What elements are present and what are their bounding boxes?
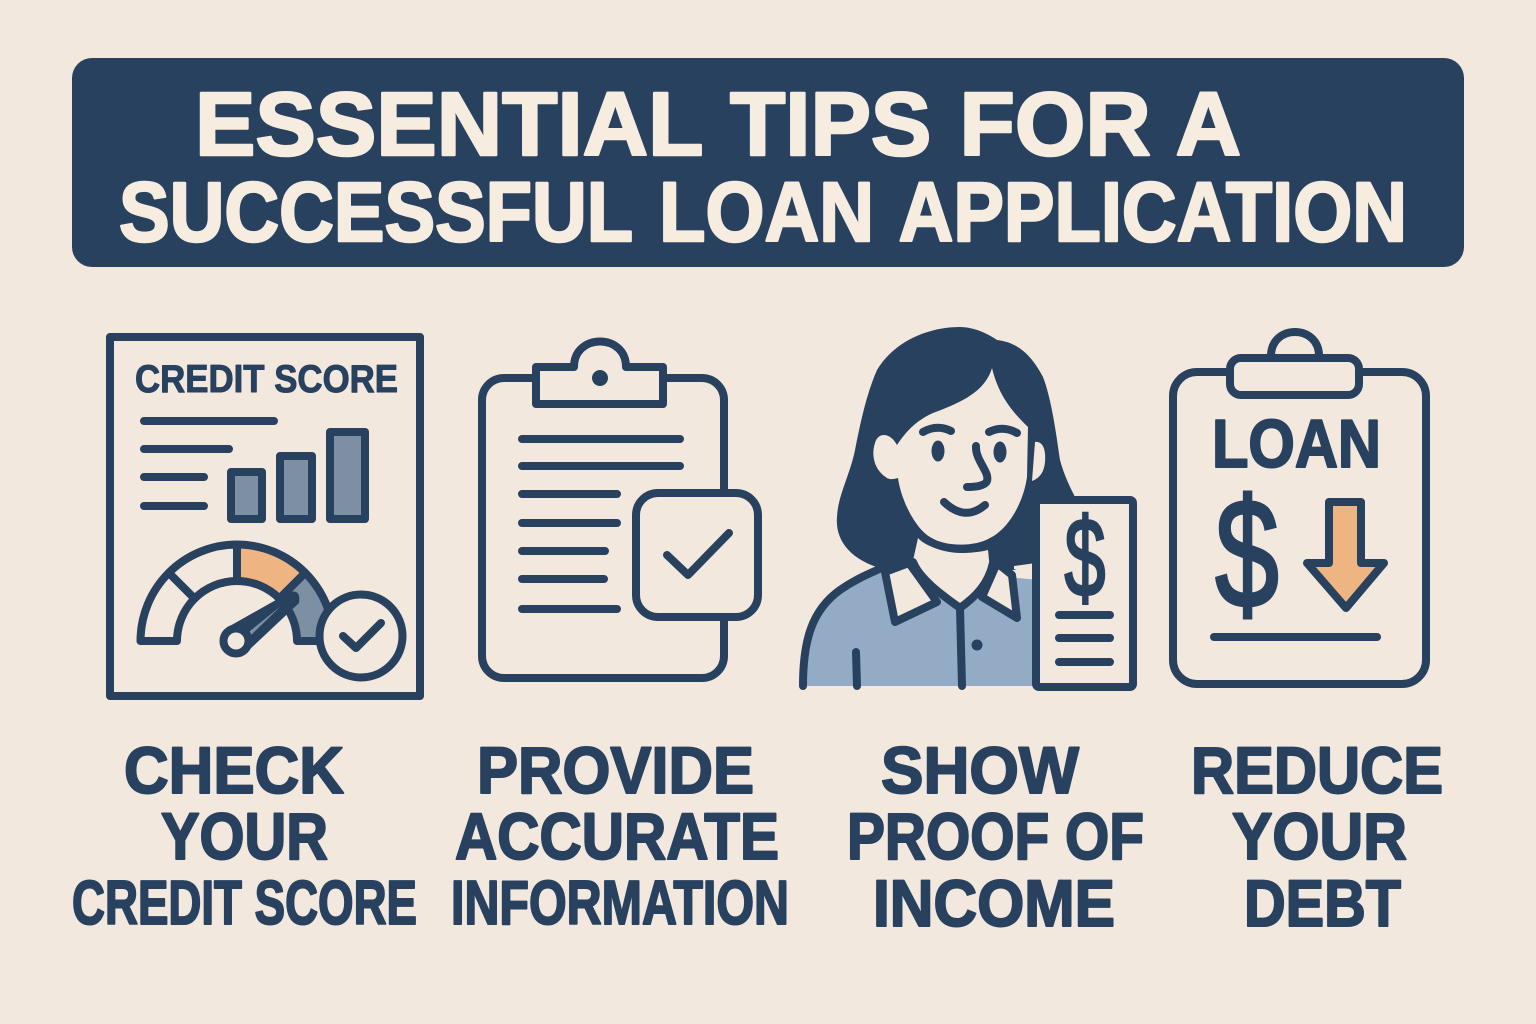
caption: reduce your debt: DEBT — [1244, 866, 1401, 940]
shirt — [803, 566, 1040, 686]
icon: loan clipboard with debt arrow — [1173, 332, 1426, 684]
caption: check your credit score: YOUR — [161, 799, 328, 873]
shirt outline — [803, 566, 885, 686]
caption: reduce your debt: REDUCE — [1191, 733, 1443, 807]
caption: check your credit score: CHECK — [124, 733, 344, 807]
caption: provide accurate information: PROVIDE — [477, 733, 754, 807]
caption: show proof of income: SHOW — [881, 733, 1080, 807]
caption: reduce your debt: YOUR — [1232, 799, 1407, 873]
clipboard clip — [1230, 332, 1359, 395]
check box — [636, 493, 758, 617]
income receipt — [1036, 496, 1133, 687]
caption: show proof of income — [847, 733, 1144, 940]
caption: reduce your debt — [1191, 733, 1443, 940]
caption: provide accurate information — [451, 733, 789, 938]
underline — [1214, 633, 1377, 641]
form lines — [522, 439, 680, 609]
right ear — [1032, 442, 1045, 481]
icon: credit score report — [110, 337, 420, 696]
hair — [837, 327, 1075, 570]
face — [873, 368, 1028, 545]
shirt details — [856, 608, 982, 686]
title line 2: SUCCESSFUL LOAN APPLICATION — [119, 165, 1407, 259]
icon: person with income receipt — [803, 327, 1133, 687]
collar right strap — [1014, 563, 1036, 578]
facial features — [923, 428, 1017, 513]
down arrow — [1307, 502, 1384, 608]
icon heading: loan: LOAN — [1212, 406, 1381, 482]
neck and collar — [885, 538, 1017, 622]
caption: check your credit score: CREDIT SCORE — [72, 869, 417, 938]
dollar sign: $ — [1215, 467, 1279, 640]
caption: check your credit score — [72, 733, 417, 938]
caption: show proof of income: PROOF OF — [847, 799, 1144, 873]
title banner — [72, 58, 1464, 267]
bar chart — [231, 432, 365, 519]
credit gauge — [140, 544, 334, 641]
caption: provide accurate information: INFORMATION — [451, 869, 789, 938]
caption: provide accurate information: ACCURATE — [455, 799, 779, 873]
dollar sign: $ — [1065, 496, 1105, 620]
receipt lines — [1059, 615, 1110, 662]
icon heading: credit score: CREDIT SCORE — [135, 358, 398, 401]
icon: clipboard with checkmark — [482, 342, 758, 678]
check badge — [320, 594, 402, 678]
gauge needle — [224, 591, 299, 654]
report text lines — [144, 421, 274, 506]
clipboard clip — [536, 342, 663, 404]
caption: show proof of income: INCOME — [873, 866, 1115, 940]
title line 1: ESSENTIAL TIPS FOR A — [195, 75, 1241, 175]
